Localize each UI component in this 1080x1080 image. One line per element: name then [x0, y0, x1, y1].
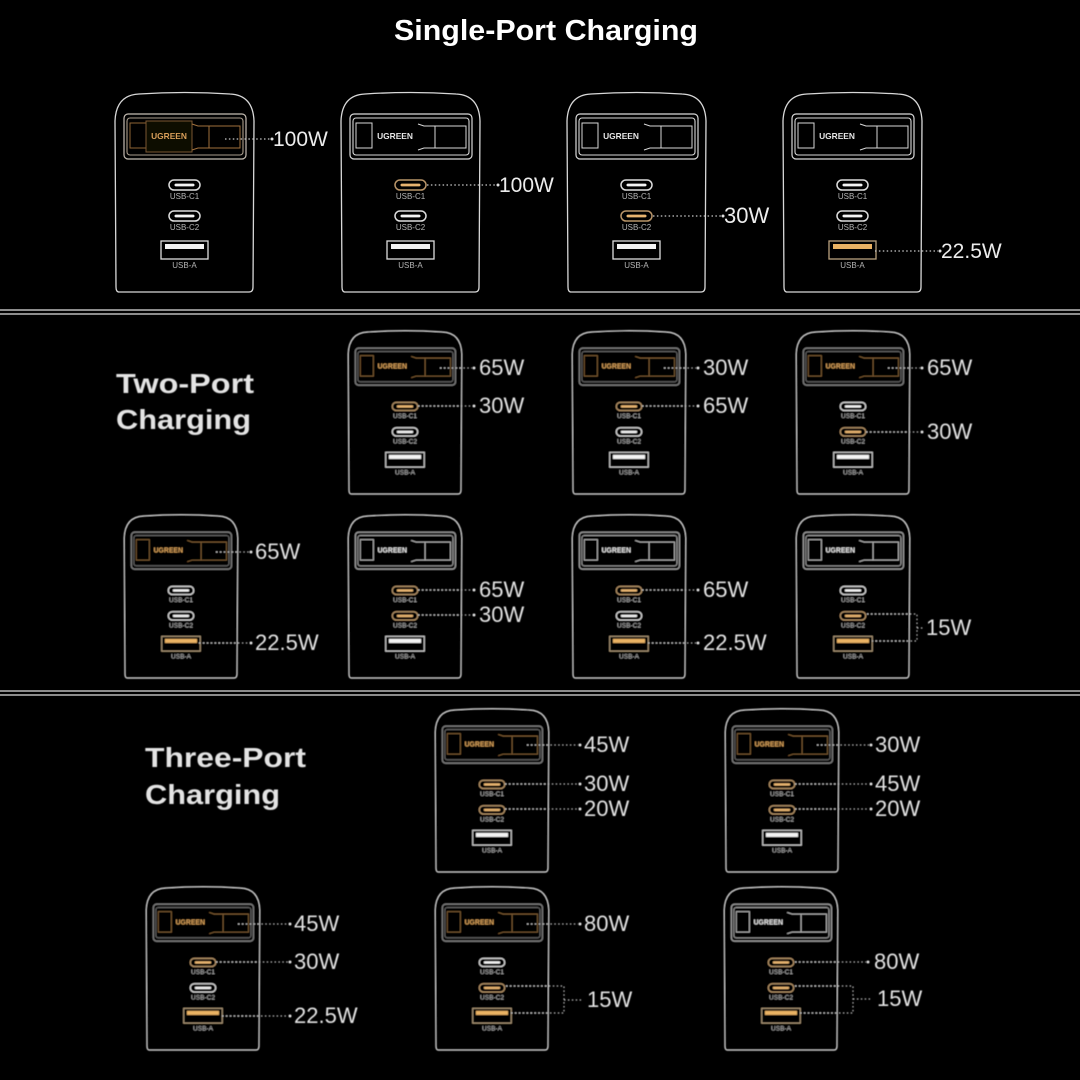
- section: three-port charging: [145, 709, 922, 1050]
- charger 2: USB-C1 100W: [341, 92, 554, 292]
- charger: 65W + 22.5W: USB-C1: [169, 597, 193, 604]
- charger: USB-C1 65W + USB-A 22.5W: USB-A: [619, 654, 640, 661]
- charger: USB-C1 80W + shared 15W: UGREEN: [754, 920, 783, 927]
- charger 3: USB-C2 30W: 30W: [724, 203, 769, 228]
- section: single-port charging: [115, 92, 1002, 292]
- charger: 80W + shared 15W: [435, 887, 632, 1050]
- charger: 45W + 30W + 20W: USB-C2: [480, 816, 504, 823]
- charger: 65W + 22.5W: USB-A: [171, 654, 192, 661]
- divider: two / three port: [0, 690, 1080, 696]
- charger: 65W + 22.5W: 22.5W: [255, 630, 319, 655]
- charger: USB-C2 + USB-A shared 15W: [796, 515, 971, 678]
- charger 2: USB-C1 100W: USB-C1: [396, 192, 426, 201]
- charger: USB-C1 80W + shared 15W: USB-A: [771, 1026, 792, 1033]
- charger: 45W + 30W + 20W: USB-A: [482, 848, 503, 855]
- charger: USB-C1 65W + USB-C2 30W: USB-C1: [393, 597, 417, 604]
- heading: Three-Port Charging: Three-Port: [145, 742, 306, 773]
- heading: Two-Port Charging: Two-Port: [116, 368, 254, 399]
- charger 1: plug port 100W: USB-C1: [170, 192, 200, 201]
- charger 3: USB-C2 30W: USB-A: [624, 261, 649, 270]
- charger 4: USB-A 22.5W: 22.5W: [941, 240, 1002, 263]
- charger 2: USB-C1 100W: USB-C2: [396, 223, 426, 232]
- charger: 45W + 30W + 22.5W: [146, 887, 358, 1050]
- charger 1: plug port 100W: 100W: [273, 128, 328, 151]
- charger: 30W + 45W + 20W: 45W: [875, 771, 920, 796]
- charger 1: plug port 100W: UGREEN: [151, 131, 187, 141]
- charger: 30W + 65W: [572, 331, 748, 494]
- charger: 65W + 30W: 30W: [479, 393, 524, 418]
- charger: USB-C1 80W + shared 15W: 80W: [874, 949, 919, 974]
- charger: USB-C1 65W + USB-A 22.5W: USB-C1: [617, 597, 641, 604]
- charger: 45W + 30W + 20W: 20W: [584, 796, 629, 821]
- charger: 80W + shared 15W: 80W: [584, 911, 629, 936]
- charger 4: USB-A 22.5W: USB-C1: [838, 192, 868, 201]
- charger: 65W + 22.5W: [124, 515, 319, 678]
- charger: 45W + 30W + 22.5W: UGREEN: [176, 920, 205, 927]
- heading: Three-Port Charging: Charging: [145, 779, 280, 810]
- charger: 45W + 30W + 22.5W: 30W: [294, 949, 339, 974]
- charger: 30W + 45W + 20W: [725, 709, 920, 872]
- charger: USB-C1 65W + USB-C2 30W: 65W: [479, 577, 524, 602]
- charger: 30W + 65W: USB-C1: [617, 413, 641, 420]
- charger: USB-C1 80W + shared 15W: [724, 887, 922, 1050]
- charger: 80W + shared 15W: USB-C1: [480, 969, 504, 976]
- charger: USB-C2 + USB-A shared 15W: USB-C1: [841, 597, 865, 604]
- charger: 65W + 30W: USB-C2: [393, 438, 417, 445]
- charger 4: USB-A 22.5W: USB-A: [840, 261, 865, 270]
- charger: 45W + 30W + 20W: 45W: [584, 732, 629, 757]
- charger: 80W + shared 15W: 15W: [587, 987, 632, 1012]
- charger: 45W + 30W + 22.5W: 45W: [294, 911, 339, 936]
- charger: 65W + 30W on USB-C2: USB-C2: [841, 438, 865, 445]
- charger: 30W + 65W: 30W: [703, 355, 748, 380]
- charger: 65W + 30W: 65W: [479, 355, 524, 380]
- charger: 65W + 22.5W: USB-C2: [169, 622, 193, 629]
- charger: 45W + 30W + 22.5W: USB-C2: [191, 994, 215, 1001]
- section: two-port charging: [116, 331, 972, 678]
- charger: USB-C1 65W + USB-C2 30W: [348, 515, 524, 678]
- charger: 30W + 45W + 20W: 20W: [875, 796, 920, 821]
- title: Single-Port Charging: Single-Port Charging: [394, 15, 698, 47]
- charger: 30W + 45W + 20W: USB-C1: [770, 791, 794, 798]
- charger: USB-C1 65W + USB-C2 30W: USB-A: [395, 654, 416, 661]
- charger: 45W + 30W + 20W: 30W: [584, 771, 629, 796]
- charger 1: plug port 100W: USB-C2: [170, 223, 200, 232]
- heading: Three-Port Charging: [145, 742, 306, 810]
- charger: 65W + 30W: [348, 331, 524, 494]
- charger: 30W + 65W: UGREEN: [602, 364, 631, 371]
- heading: Two-Port Charging: [116, 368, 254, 435]
- charger: USB-C1 80W + shared 15W: USB-C1: [769, 969, 793, 976]
- charger: 30W + 65W: 65W: [703, 393, 748, 418]
- charger: USB-C1 65W + USB-C2 30W: UGREEN: [378, 548, 407, 555]
- charger: 30W + 45W + 20W: UGREEN: [755, 742, 784, 749]
- charger: USB-C1 65W + USB-A 22.5W: 65W: [703, 577, 748, 602]
- charger 3: USB-C2 30W: USB-C2: [622, 223, 652, 232]
- charger: USB-C2 + USB-A shared 15W: 15W: [926, 615, 971, 640]
- charger: 30W + 65W: USB-C2: [617, 438, 641, 445]
- heading: Two-Port Charging: Charging: [116, 404, 251, 435]
- charger: USB-C2 + USB-A shared 15W: USB-C2: [841, 622, 865, 629]
- charger: USB-C1 65W + USB-C2 30W: USB-C2: [393, 622, 417, 629]
- charger: 45W + 30W + 20W: UGREEN: [465, 742, 494, 749]
- charger: 65W + 30W on USB-C2: 65W: [927, 355, 972, 380]
- charger 4: USB-A 22.5W: USB-C2: [838, 223, 868, 232]
- charger 3: USB-C2 30W: USB-C1: [622, 192, 652, 201]
- charger 2: USB-C1 100W: 100W: [499, 174, 554, 197]
- charger: 30W + 45W + 20W: 30W: [875, 732, 920, 757]
- charger: 65W + 30W on USB-C2: 30W: [927, 419, 972, 444]
- charger: 65W + 30W: USB-A: [395, 470, 416, 477]
- charger: 65W + 30W on USB-C2: [796, 331, 972, 494]
- charger: 65W + 30W: USB-C1: [393, 413, 417, 420]
- charger: 80W + shared 15W: USB-C2: [480, 994, 504, 1001]
- charger: 30W + 65W: USB-A: [619, 470, 640, 477]
- charger: 65W + 30W on USB-C2: UGREEN: [826, 364, 855, 371]
- divider: single / two port: [0, 309, 1080, 315]
- charger 1: plug port 100W: USB-A: [172, 261, 197, 270]
- charger 2: USB-C1 100W: UGREEN: [377, 131, 413, 141]
- charger: USB-C2 + USB-A shared 15W: UGREEN: [826, 548, 855, 555]
- charger: USB-C1 65W + USB-A 22.5W: UGREEN: [602, 548, 631, 555]
- charger: USB-C1 80W + shared 15W: USB-C2: [769, 994, 793, 1001]
- charger: 80W + shared 15W: UGREEN: [465, 920, 494, 927]
- charger 2: USB-C1 100W: USB-A: [398, 261, 423, 270]
- charger: 65W + 30W on USB-C2: USB-A: [843, 470, 864, 477]
- charger: 65W + 22.5W: UGREEN: [154, 548, 183, 555]
- charger: 30W + 45W + 20W: USB-C2: [770, 816, 794, 823]
- charger: 45W + 30W + 22.5W: 22.5W: [294, 1003, 358, 1028]
- charger 3: USB-C2 30W: UGREEN: [603, 131, 639, 141]
- charger 1: plug port 100W: [115, 92, 328, 292]
- charger: 65W + 30W: UGREEN: [378, 364, 407, 371]
- charger 3: USB-C2 30W: [567, 92, 769, 292]
- charger: 65W + 30W on USB-C2: USB-C1: [841, 413, 865, 420]
- charger: 65W + 22.5W: 65W: [255, 539, 300, 564]
- charger: 45W + 30W + 22.5W: USB-C1: [191, 969, 215, 976]
- charger: 30W + 45W + 20W: USB-A: [772, 848, 793, 855]
- charger: USB-C1 65W + USB-A 22.5W: 22.5W: [703, 630, 767, 655]
- charger: USB-C1 65W + USB-A 22.5W: [572, 515, 767, 678]
- charger: 80W + shared 15W: USB-A: [482, 1026, 503, 1033]
- charger 4: USB-A 22.5W: [783, 92, 1002, 292]
- charger 4: USB-A 22.5W: UGREEN: [819, 131, 855, 141]
- charger: 45W + 30W + 20W: [435, 709, 629, 872]
- charger: USB-C1 65W + USB-C2 30W: 30W: [479, 602, 524, 627]
- charger: 45W + 30W + 22.5W: USB-A: [193, 1026, 214, 1033]
- charger: USB-C1 80W + shared 15W: 15W: [877, 986, 922, 1011]
- charger: 45W + 30W + 20W: USB-C1: [480, 791, 504, 798]
- charger: USB-C1 65W + USB-A 22.5W: USB-C2: [617, 622, 641, 629]
- charger: USB-C2 + USB-A shared 15W: USB-A: [843, 654, 864, 661]
